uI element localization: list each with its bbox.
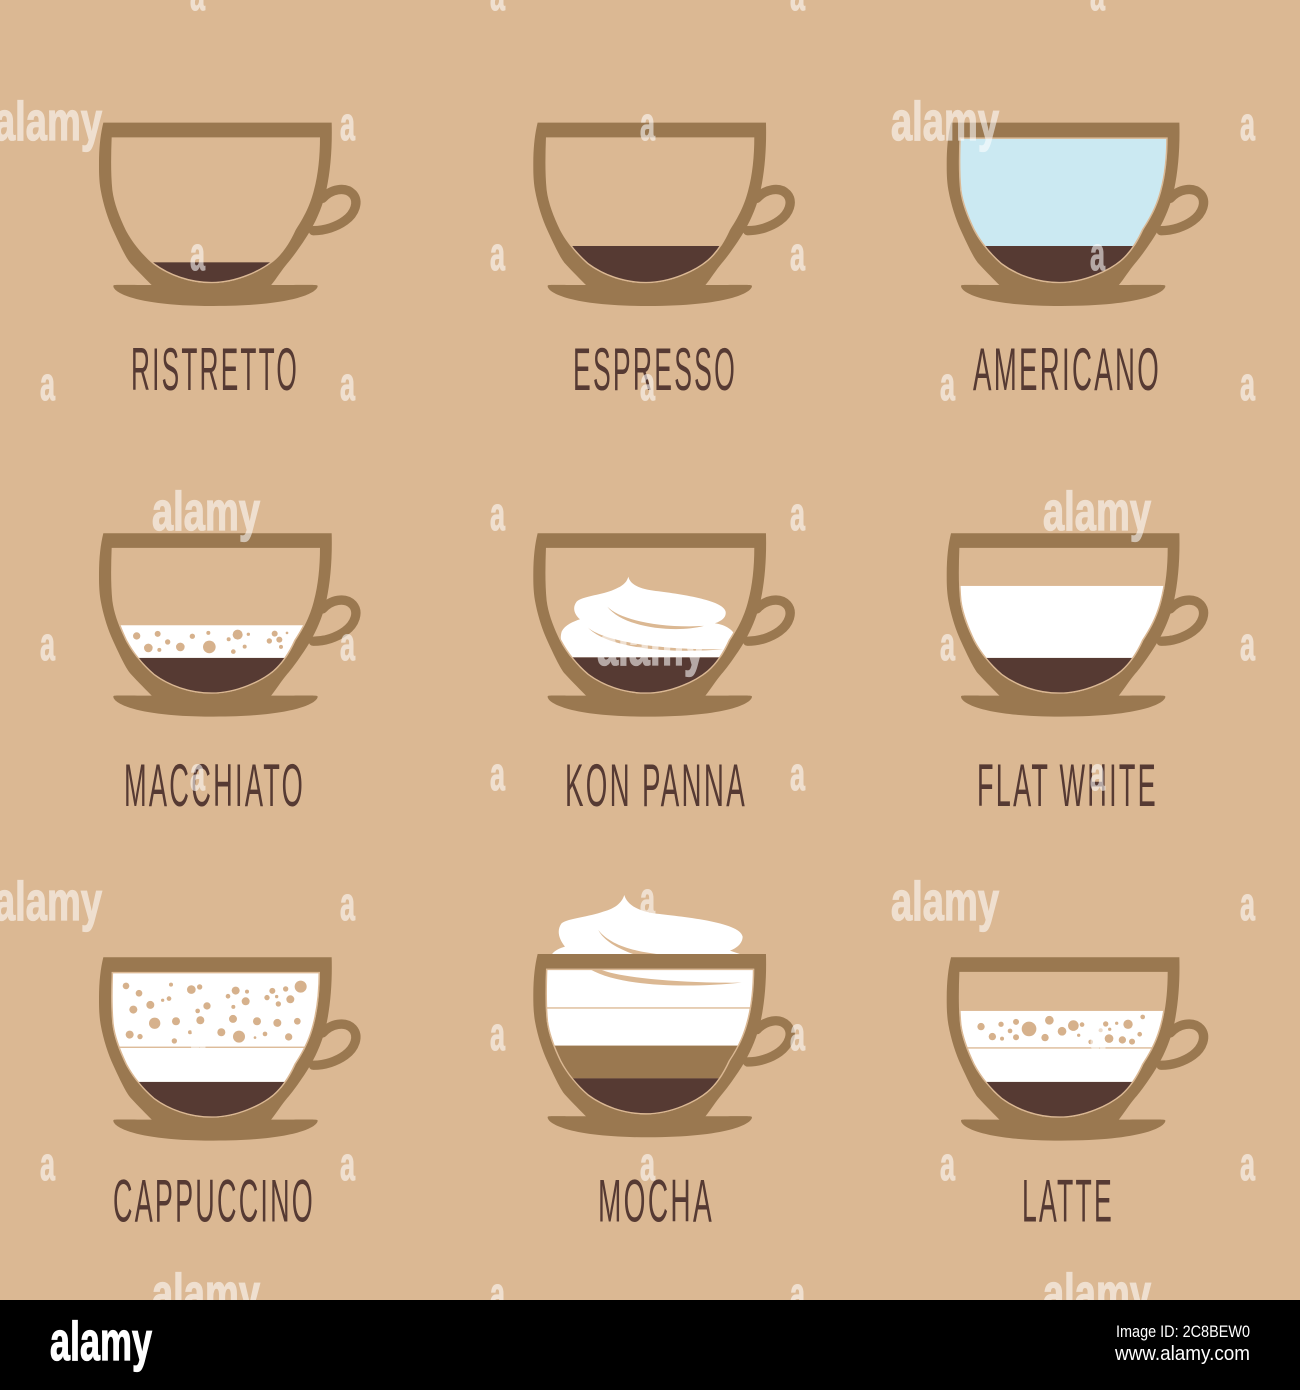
watermarks: a [940,1137,955,1190]
text: ESPRESSO [573,336,737,403]
watermarks: alamy [152,1262,260,1324]
watermarks: a [490,1267,505,1320]
footer logo: alamy [50,1310,152,1372]
text: LATTE [1022,1168,1114,1234]
footer bar [0,1300,1300,1390]
watermarks: alamy [1043,480,1151,542]
cup: latte [947,957,1204,1141]
cup: kon panna [533,533,790,717]
watermarks: a [640,1137,655,1190]
watermarks: a [1240,1137,1255,1190]
watermarks: a [790,487,805,540]
watermarks: a [1240,617,1255,670]
text: MACCHIATO [124,752,305,819]
whipped cream [552,895,743,955]
watermarks: a [490,487,505,540]
watermarks: a [940,357,955,410]
watermarks: alamy [1043,1262,1151,1324]
watermarks: a [490,747,505,800]
watermarks: alamy [891,90,999,152]
cup: espresso [533,123,790,306]
watermarks: a [1090,1007,1105,1060]
watermarks: a [790,1267,805,1320]
watermarks: a [640,97,655,150]
watermarks: a [490,227,505,280]
text: CAPPUCCINO [113,1168,315,1234]
watermarks: a [940,617,955,670]
watermarks: a [340,97,355,150]
cup: flat white [947,533,1204,717]
text: RISTRETTO [131,336,299,403]
watermarks: a [790,227,805,280]
watermarks: a [190,747,205,800]
watermarks: a [640,872,655,925]
watermarks: a [340,877,355,930]
watermarks: a [190,227,205,280]
watermarks: a [1240,97,1255,150]
whipped cream [561,577,735,657]
cup: cappuccino [99,957,356,1141]
watermarks: a [40,1137,55,1190]
watermarks: a [340,1137,355,1190]
watermarks: alamy [891,870,999,932]
watermarks: a [1240,357,1255,410]
watermarks: a [1090,227,1105,280]
watermarks: a [40,617,55,670]
watermarks: a [640,357,655,410]
watermarks: a [340,357,355,410]
cup: ristretto [99,123,356,306]
watermarks: a [40,357,55,410]
watermarks: alamy [597,615,705,677]
cup: macchiato [99,533,356,717]
watermarks: a [1240,877,1255,930]
image id: Image ID: 2C8BEW0 [1116,1322,1250,1341]
website: www.alamy.com [1114,1343,1250,1365]
watermarks: a [340,617,355,670]
text: MOCHA [598,1168,714,1234]
watermarks: a [490,1007,505,1060]
watermarks: a [790,747,805,800]
text: KON PANNA [565,752,747,819]
cup: americano [947,123,1204,306]
watermarks: a [790,1007,805,1060]
watermarks: alamy [152,480,260,542]
watermarks: a [190,1007,205,1060]
watermarks: a [1090,747,1105,800]
cup: mocha [533,895,790,1137]
